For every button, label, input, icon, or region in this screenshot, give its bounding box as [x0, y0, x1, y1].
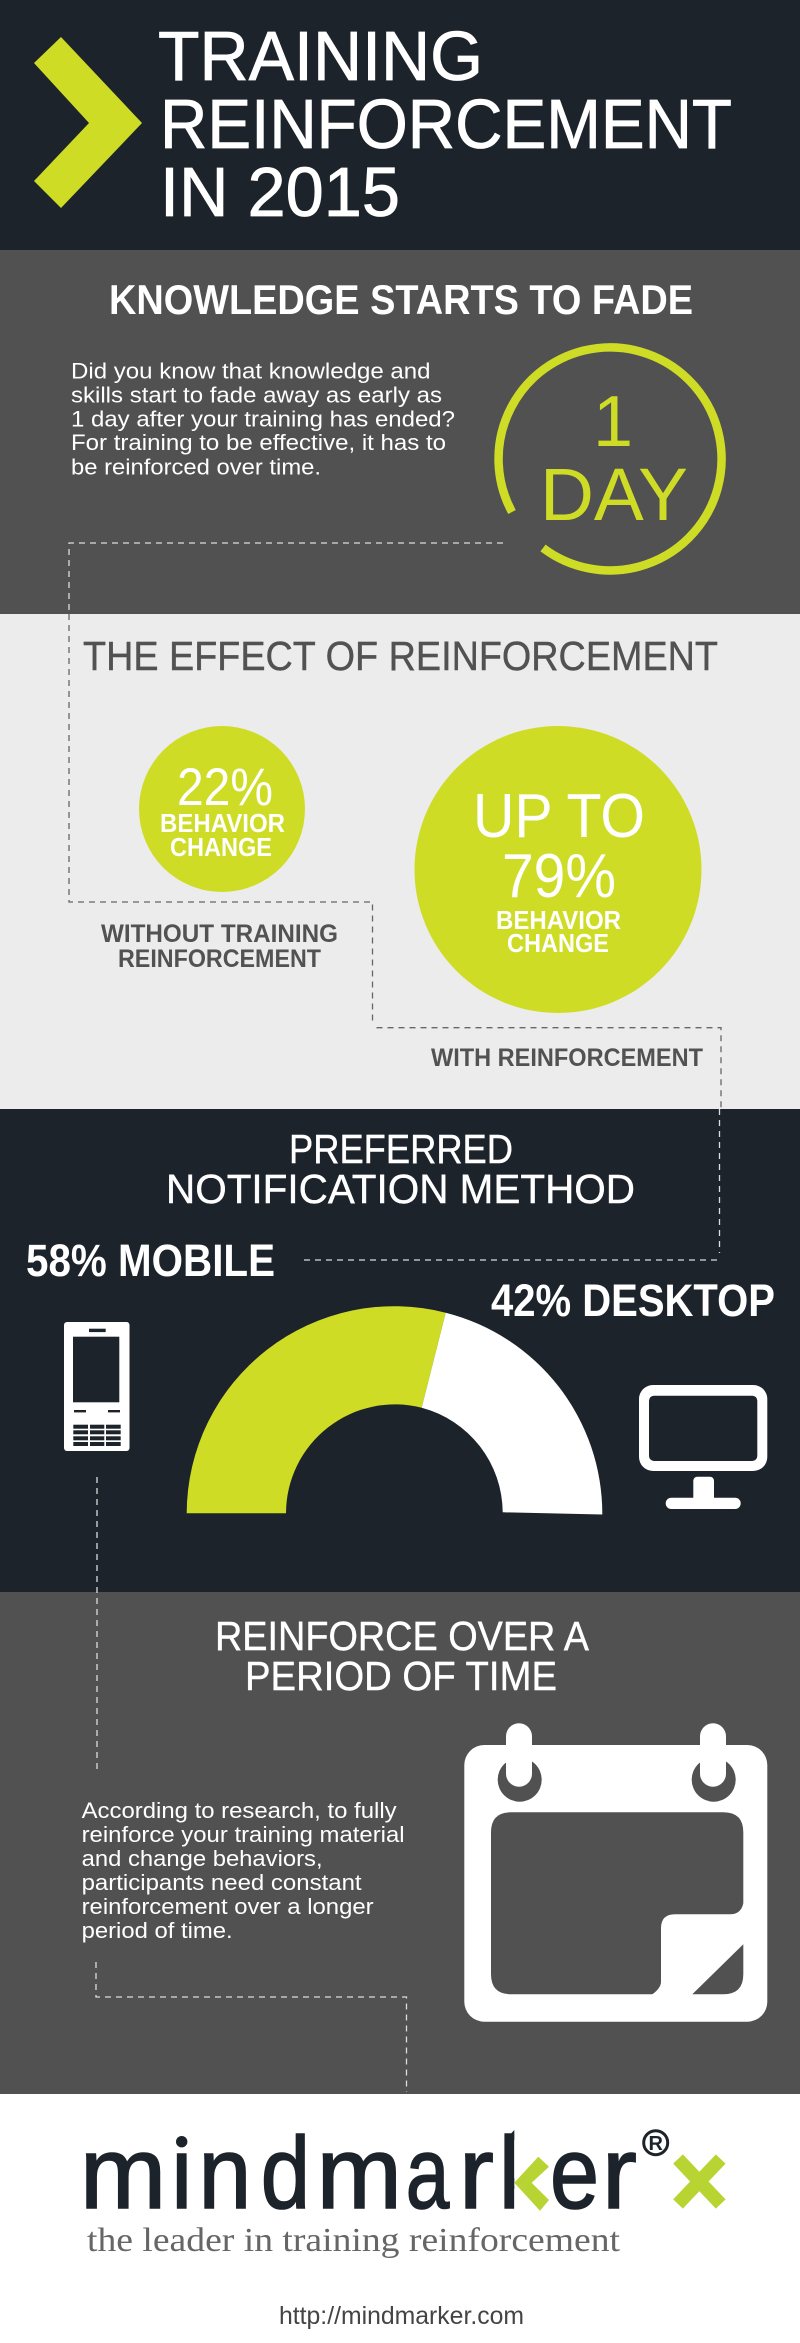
gauge segment: mobile 58%: [187, 1306, 446, 1513]
heading: the effect of reinforcement: THE EFFECT OF REINFORCEMENT: [83, 633, 718, 679]
stat circle: up to 79% behavior change: CHANGE: [507, 928, 609, 958]
dashed connector path: [69, 543, 721, 2092]
logo: mindmarker: e: [550, 2116, 599, 2230]
text block: knowledge intro: be reinforced over time.: [71, 454, 321, 480]
text block: reinforcement research: and change behaviors,: [82, 1846, 323, 1871]
stat circle: up to 79% behavior change: UP TO: [473, 782, 645, 851]
stat circle: 22% behavior change: 22%: [177, 758, 273, 817]
tagline: the leader in training reinforcement: [87, 2222, 621, 2259]
label: with reinforcement: WITH REINFORCEMENT: [431, 1044, 703, 1072]
label: 58% mobile: 58% MOBILE: [26, 1235, 275, 1286]
heading: preferred notification method: PREFERRED: [289, 1126, 513, 1172]
logo: mindmarker: d: [261, 2116, 310, 2230]
logo: mindmarker: k: [499, 2116, 547, 2230]
panel: knowledge starts to fade: [0, 250, 800, 614]
chart: notification gauge: [187, 1306, 602, 1514]
stat circle: up to 79% behavior change: BEHAVIOR: [496, 905, 621, 935]
logo: mindmarker: m: [80, 2116, 166, 2230]
text block: knowledge intro: [71, 358, 455, 480]
logo: mindmarker: r: [459, 2116, 494, 2230]
logo: mindmarker: [86, 2129, 726, 2211]
icon: chevron: [34, 37, 142, 208]
stat circle: 22% behavior change: CHANGE: [170, 832, 272, 862]
label: without training reinforcement: WITHOUT TRAINING: [101, 920, 338, 948]
heading: reinforce over a period of time: PERIOD OF TIME: [245, 1653, 557, 1699]
heading: reinforce over a period of time: [215, 1613, 590, 1699]
panel: reinforce over a period of time: [0, 1592, 800, 2094]
logo: mindmarker: a: [406, 2116, 450, 2230]
heading: preferred notification method: [166, 1126, 635, 1212]
title: IN 2015: [160, 153, 400, 231]
text block: reinforcement research: reinforcement over a longer: [82, 1894, 374, 1919]
text block: reinforcement research: reinforce your training material: [82, 1822, 405, 1847]
title: [158, 17, 732, 231]
icon: 1 day ring: DAY: [540, 453, 688, 536]
logo: mindmarker: i: [171, 2116, 192, 2230]
text block: knowledge intro: For training to be effective, it has to: [71, 430, 446, 455]
logo: mindmarker: r: [602, 2116, 637, 2230]
stat circle: up to 79% behavior change: 79%: [502, 842, 616, 911]
website url: http://mindmarker.com: [279, 2302, 524, 2330]
panel: preferred notification method: [0, 1109, 800, 1592]
text block: knowledge intro: 1 day after your training has ended?: [71, 406, 455, 432]
title: REINFORCEMENT: [160, 85, 732, 163]
logo: mindmarker: m: [317, 2116, 402, 2230]
icon: 1 day ring: 1: [593, 382, 633, 462]
panel: the effect of reinforcement: [0, 614, 800, 1109]
text block: knowledge intro: skills start to fade away as early as: [71, 382, 442, 408]
heading: knowledge starts to fade: KNOWLEDGE STARTS TO FADE: [109, 276, 693, 323]
label: without training reinforcement: [101, 920, 338, 973]
icon: calendar: [464, 1723, 767, 2022]
title: TRAINING: [158, 17, 483, 95]
gauge segment: desktop 42%: [422, 1313, 602, 1514]
heading: preferred notification method: NOTIFICATION METHOD: [166, 1166, 635, 1212]
panel: header: [0, 0, 800, 250]
icon: 1 day ring: [499, 347, 722, 570]
text block: reinforcement research: period of time.: [82, 1918, 233, 1943]
text block: reinforcement research: participants need constant: [82, 1870, 362, 1895]
label: without training reinforcement: REINFORCEMENT: [118, 945, 321, 973]
text block: reinforcement research: [82, 1798, 405, 1943]
stat circle: 22% behavior change: BEHAVIOR: [160, 808, 285, 838]
heading: reinforce over a period of time: REINFORCE OVER A: [215, 1613, 590, 1659]
stat circle: up to 79% behavior change: [414, 726, 702, 1013]
logo: mindmarker: R: [648, 2133, 663, 2155]
logo: mindmarker: n: [198, 2116, 251, 2230]
stat circle: 22% behavior change: [139, 726, 305, 892]
text block: knowledge intro: Did you know that knowledge and: [71, 358, 430, 384]
text block: reinforcement research: According to research, to fully: [82, 1798, 397, 1823]
panel: footer: [86, 2129, 726, 2329]
icon: desktop monitor: [639, 1385, 767, 1509]
icon: mobile phone: [64, 1322, 130, 1451]
